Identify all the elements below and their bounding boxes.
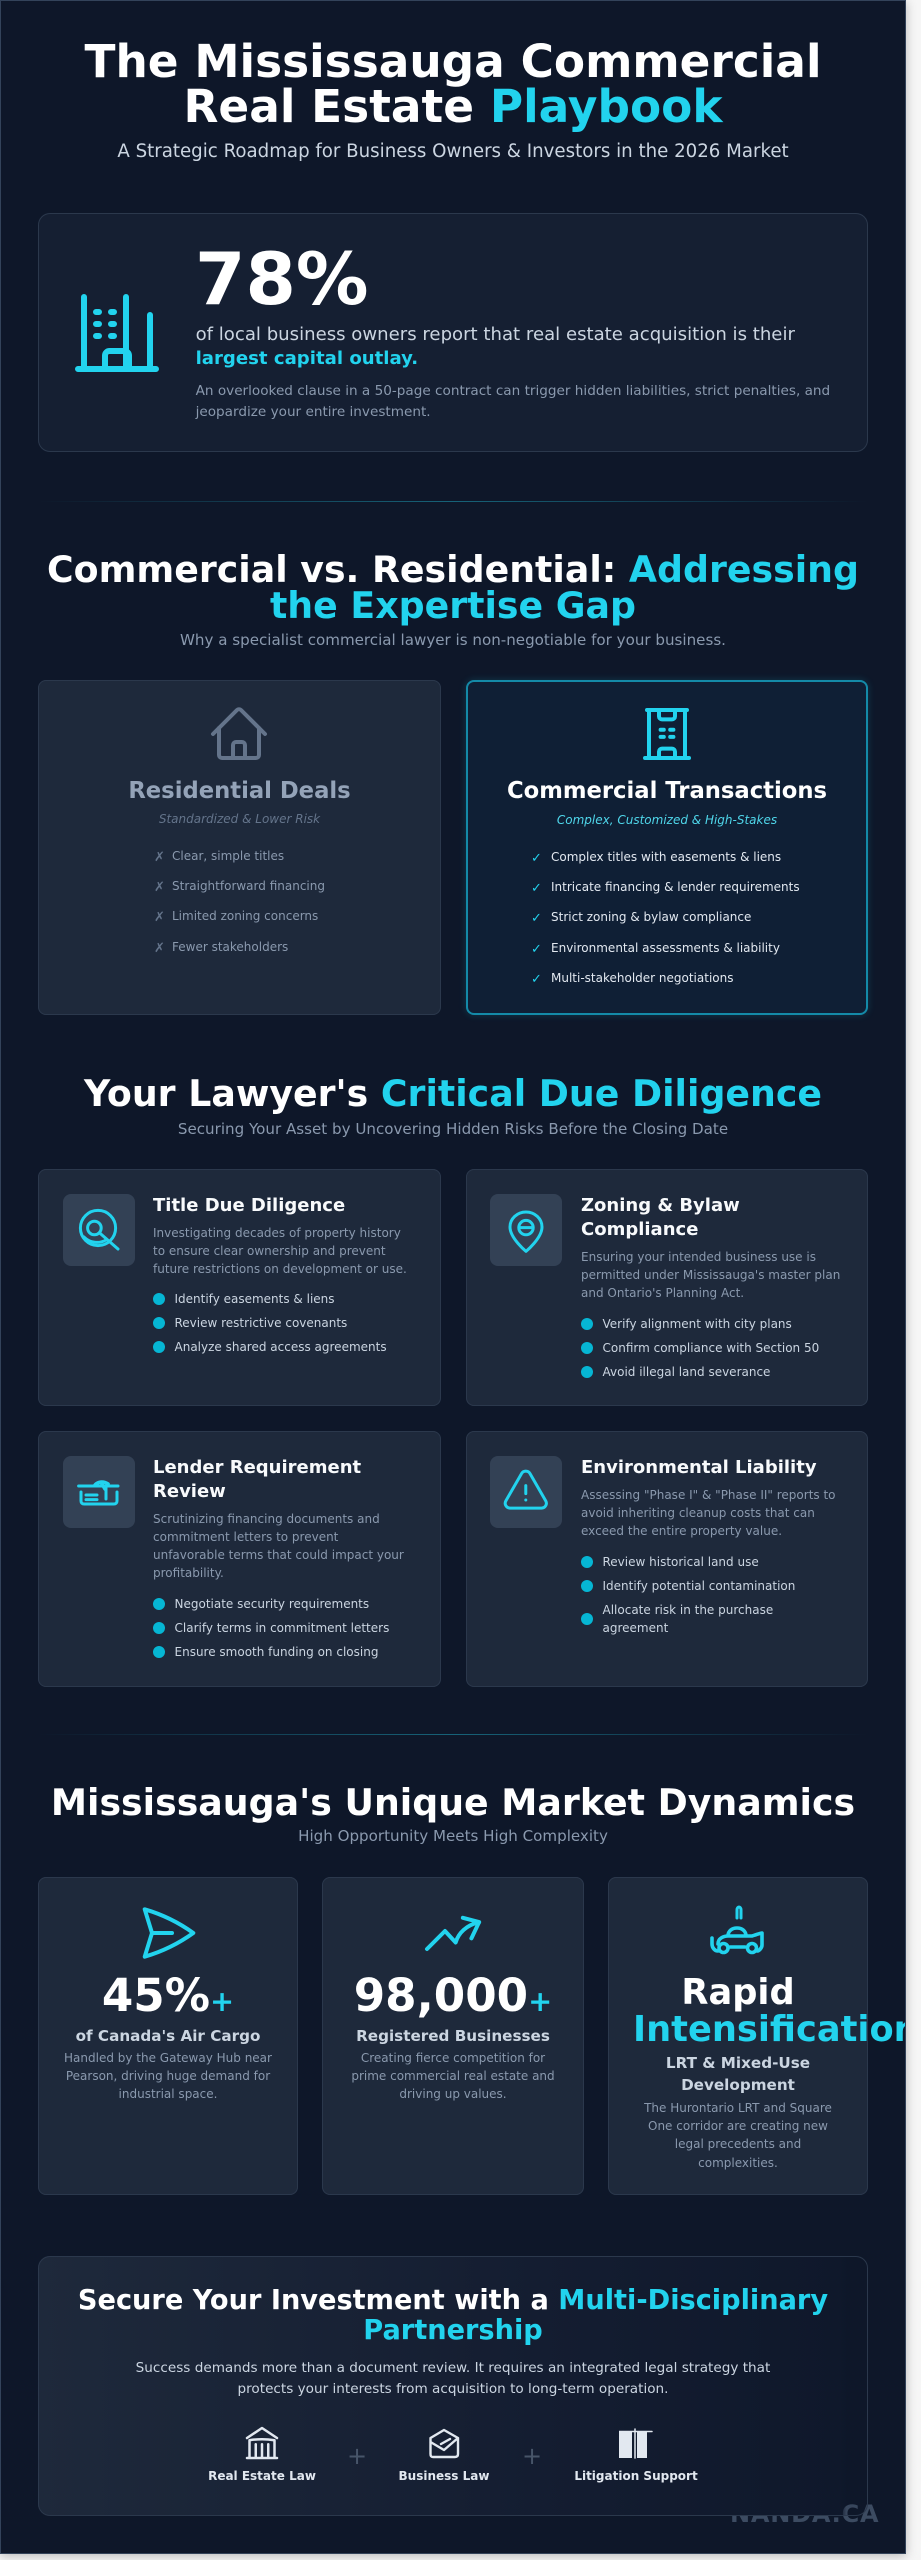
panel: commercial transactions [466,680,868,1015]
residential list: Limited zoning concerns [172,909,318,923]
stat description: Pearson, driving huge demand for [66,2069,270,2083]
icon: house [210,707,268,760]
card title: Review [153,1481,226,1502]
panel: air cargo stat [38,1877,298,2195]
card description: exceed the entire property value. [581,1524,782,1538]
residential list: Fewer stakeholders [172,940,288,954]
icon: magnifier on seal [63,1194,135,1266]
icon: trending up arrow [424,1916,482,1952]
card description: permitted under Mississauga's master plan [581,1268,840,1282]
residential tagline: Standardized & Lower Risk [159,812,320,826]
icon: location pin [490,1194,562,1266]
label: Litigation Support [574,2469,698,2483]
card title: Lender Requirement [153,1457,361,1478]
card description: Investigating decades of property history [153,1226,401,1240]
commercial list: Environmental assessments & liability [551,941,780,955]
residential list: ✗ [154,910,165,925]
card checklist: Confirm compliance with Section 50 [602,1341,819,1355]
commercial list: ✓ [531,942,542,957]
commercial list: ✓ [531,851,542,866]
card checklist: Ensure smooth funding on closing [174,1645,378,1659]
service: litigation support [574,2428,698,2483]
title: Real Estate Playbook [183,80,723,133]
residential heading: Residential Deals [128,778,351,804]
stat description: industrial space. [119,2087,217,2101]
hero detail text [195,382,830,420]
card title: Zoning & Bylaw [581,1195,740,1216]
icon: office building [75,294,159,372]
label: Business Law [399,2469,489,2483]
stat number: 98,000+ [354,1969,552,2022]
residential list: Clear, simple titles [172,849,284,863]
card checklist: Avoid illegal land severance [602,1365,770,1379]
stat label [666,2054,810,2094]
panel: zoning and bylaw compliance [466,1169,868,1406]
stat description: complexities. [698,2156,778,2170]
card description [581,1250,840,1300]
panel: hero statistic [38,213,868,452]
icon: courthouse [246,2426,278,2460]
panel: call to action [38,2256,868,2516]
call to action text: Success demands more than a document review. It requires an integrated legal strategy that [136,2360,770,2376]
stat description: driving up values. [399,2087,507,2101]
subheading: due diligence: Securing Your Asset by Uncovering Hidden Risks Before the Closing Date [178,1120,728,1138]
call to action heading [78,2285,828,2346]
card checklist: agreement [602,1621,668,1635]
call to action heading: Partnership [363,2315,543,2346]
call to action heading: Secure Your Investment with a Multi-Disciplinary [78,2285,828,2316]
hero detail text: jeopardize your entire investment. [196,404,431,420]
service: business law [399,2428,489,2483]
title [84,35,822,133]
card checklist: Review historical land use [602,1555,759,1569]
card description: future restrictions on development or use. [153,1262,407,1276]
commercial list: Intricate financing & lender requirements [551,880,800,894]
hero statement: of local business owners report that real estate acquisition is their [196,324,795,345]
icon: open doors [619,2428,653,2459]
card checklist: Negotiate security requirements [174,1597,369,1611]
card description [153,1512,404,1580]
icon: paper airplane [142,1907,196,1959]
stat label: Development [681,2076,795,2094]
card description: avoid inheriting cleanup costs that can [581,1506,815,1520]
card description: to ensure clear ownership and prevent [153,1244,386,1258]
icon: transit vehicle [710,1906,764,1954]
card checklist: Clarify terms in commitment letters [174,1621,389,1635]
card checklist [153,1292,387,1354]
residential list [154,849,325,956]
card title: Title Due Diligence [153,1195,345,1216]
panel: lender requirement review [38,1431,441,1687]
panel: rapid intensification stat [608,1877,868,2195]
subheading: market dynamics: High Opportunity Meets High Complexity [298,1827,608,1845]
heading: commercial vs residential: the Expertise Gap [270,584,636,627]
heading: due diligence: Your Lawyer's Critical Due Diligence [84,1072,822,1115]
heading: market dynamics: Mississauga's Unique Market Dynamics [51,1781,855,1824]
card description: Scrutinizing financing documents and [153,1512,380,1526]
card checklist: Verify alignment with city plans [602,1317,792,1331]
heading: commercial vs residential [47,548,859,627]
card description [581,1488,836,1538]
card checklist [581,1555,795,1635]
commercial list: Multi-stakeholder negotiations [551,971,733,985]
commercial list: Complex titles with easements & liens [551,850,781,864]
panel: title due diligence [38,1169,441,1406]
card description [153,1226,407,1276]
hero statement [196,324,795,369]
stat description: Handled by the Gateway Hub near [64,2051,272,2065]
card title: Compliance [581,1219,698,1240]
stat label: LRT & Mixed-Use [666,2054,810,2072]
commercial list: ✓ [531,911,542,926]
subtitle: A Strategic Roadmap for Business Owners & Investors in the 2026 Market [117,141,789,162]
call to action text [136,2360,770,2397]
service: real estate law [208,2426,316,2483]
residential list: ✗ [154,941,165,956]
panel: residential deals [38,680,441,1015]
icon: warning triangle [490,1456,562,1528]
stat description [644,2101,832,2170]
card checklist: Identify easements & liens [174,1292,335,1306]
card description: unfavorable terms that could impact your [153,1548,404,1562]
commercial list: ✓ [531,881,542,896]
card description: profitability. [153,1566,224,1580]
stat number: 45%+ [102,1969,234,2022]
stat description: One corridor are creating new [648,2119,828,2133]
commercial list [531,850,800,987]
card title [153,1457,361,1502]
card description: Assessing "Phase I" & "Phase II" reports to [581,1488,836,1502]
plus sign: + [347,2442,367,2470]
stat description: legal precedents and [675,2137,801,2151]
card title [581,1195,740,1240]
icon: document [63,1456,135,1528]
plus sign: + [522,2442,542,2470]
hero statement: largest capital outlay. [196,348,418,369]
stat description [64,2051,272,2101]
card description: Ensuring your intended business use is [581,1250,816,1264]
stat description: prime commercial real estate and [351,2069,555,2083]
commercial list: ✓ [531,972,542,987]
residential list: Straightforward financing [172,879,325,893]
watermark: NANDA.CA [730,2500,879,2528]
card checklist: Allocate risk in the purchase [602,1603,773,1617]
commercial tagline: Complex, Customized & High-Stakes [557,813,777,827]
icon: commercial building [643,708,691,760]
card description: commitment letters to prevent [153,1530,338,1544]
residential list: ✗ [154,850,165,865]
card checklist: Analyze shared access agreements [174,1340,387,1354]
stat description [351,2051,555,2101]
residential list: ✗ [154,880,165,895]
stat headline: Rapid [681,1972,795,2013]
card checklist: Review restrictive covenants [174,1316,347,1330]
stat description: The Hurontario LRT and Square [644,2101,832,2115]
heading: commercial vs residential: Commercial vs. Residential: Addressing [47,548,859,591]
card checklist [153,1597,389,1659]
icon: open envelope [429,2428,460,2458]
label: Real Estate Law [208,2469,316,2483]
commercial heading: Commercial Transactions [507,778,827,804]
title: The Mississauga Commercial [84,35,822,88]
stat label: Registered Businesses [356,2027,550,2045]
card checklist [581,1317,819,1379]
commercial list: Strict zoning & bylaw compliance [551,910,751,924]
stat label: of Canada's Air Cargo [76,2027,260,2045]
card description: and Ontario's Planning Act. [581,1286,744,1300]
call to action text: protects your interests from acquisition to long-term operation. [238,2381,668,2397]
big number 78%: 78% [195,238,369,322]
hero detail text: An overlooked clause in a 50-page contract can trigger hidden liabilities, strict penalties, and [196,382,830,398]
card title: Environmental Liability [581,1457,817,1478]
stat description: Creating fierce competition for [361,2051,545,2065]
card checklist: Identify potential contamination [602,1579,795,1593]
panel: environmental liability [466,1431,868,1687]
panel: registered businesses stat [322,1877,584,2195]
subheading: specialist lawyer: Why a specialist commercial lawyer is non-negotiable for your business. [180,631,726,649]
stat headline [633,1972,906,2050]
